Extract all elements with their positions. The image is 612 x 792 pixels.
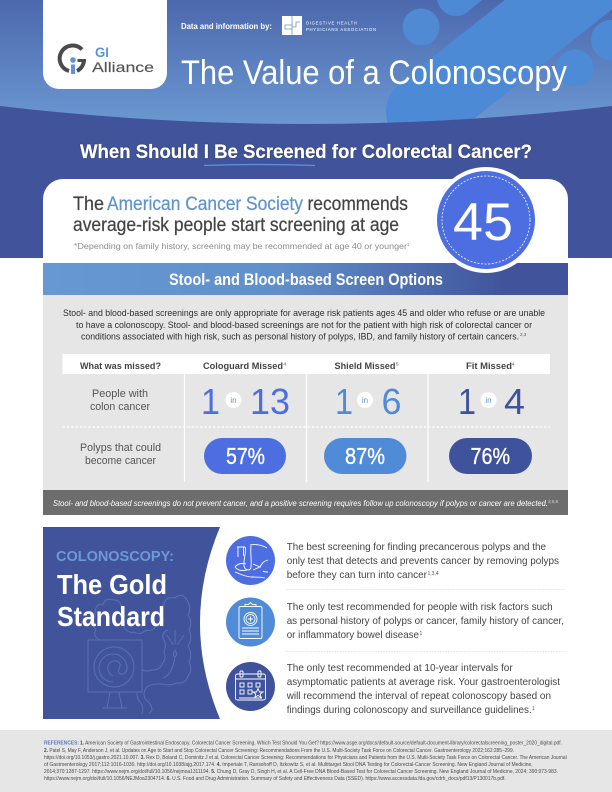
text: best screening: 1,3,4 xyxy=(428,571,439,577)
recommendation text: The xyxy=(73,194,104,215)
illustration: screen and colon outline xyxy=(88,595,191,714)
stat: Cologuard 1 in 13 xyxy=(201,381,290,422)
recommendation text: American Cancer Society xyxy=(107,194,303,215)
stat: Fit 1 in 4: 4 xyxy=(504,381,525,422)
intro paragraph: 2,3 xyxy=(520,332,527,337)
text: best screening xyxy=(287,541,559,581)
stat: Cologuard 1 in 13: 1 xyxy=(201,381,220,422)
table header row: 4 xyxy=(284,362,286,366)
section heading: When Should I Be Screened for Colorectal Cancer? xyxy=(80,142,532,163)
logo wordmark: Alliance xyxy=(92,59,154,75)
data and information credit: DIGESTIVE HEALTH xyxy=(306,20,357,26)
logo wordmark: GI xyxy=(95,45,109,60)
stat pill: Cologuard 57% xyxy=(204,438,286,474)
table header row: What was missed? xyxy=(80,361,161,371)
recommendation text xyxy=(73,194,408,236)
intro paragraph: conditions associated with high risk, such as personal history of polyps, IBD, and family history of certain cancers. xyxy=(81,332,519,342)
text: 10-year intervals: asymptomatic patients at average risk. Your gastroenterologist xyxy=(287,676,560,688)
stat: Fit 1 in 4: in xyxy=(485,396,492,405)
references xyxy=(0,730,612,792)
table header row: Cologuard Missed xyxy=(203,361,283,371)
row label: people with colon cancer xyxy=(90,388,150,413)
stat pill: Cologuard 57%: 57% xyxy=(226,443,265,469)
text: risk factors: as personal history of polyps or cancer, family history of cancer, xyxy=(287,615,564,627)
warning bar: 3,5,6 xyxy=(548,499,559,504)
icon: GI Alliance mark xyxy=(60,46,86,74)
references: 1. American Society of Gastrointestinal Endoscopy. Colorectal Cancer Screening, Which Test Should You Get? https://www.asge.org/docs/default-source/default-document-library/colorectalscreening_poster_2020_digital.pdf. xyxy=(80,740,562,746)
table header row: 4 xyxy=(512,362,515,366)
badge: age 45: 45 xyxy=(453,193,513,252)
panel heading xyxy=(57,569,167,632)
panel: stool and blood heading bar xyxy=(43,263,568,295)
references: REFERENCES: xyxy=(44,740,79,746)
warning bar xyxy=(43,490,568,515)
dark blue band xyxy=(0,106,612,258)
panel: stool and blood comparison xyxy=(43,295,568,490)
text: risk factors: 1 xyxy=(420,631,422,637)
recommendation text: recommends xyxy=(308,194,408,215)
data and information credit: Data and information by: xyxy=(181,22,272,31)
table header row xyxy=(62,354,550,374)
stat: Cologuard 1 in 13: in xyxy=(230,396,237,405)
stat pill: Fit 76%: 76% xyxy=(470,443,510,469)
text: best screening: only test that detects and prevents cancer by removing polyps xyxy=(287,555,559,567)
stat: Cologuard 1 in 13: 13 xyxy=(250,381,290,422)
stat: Shield 1 in 6: 6 xyxy=(382,381,402,422)
panel: the gold standard xyxy=(43,527,220,719)
text: 10-year intervals: The only test recommended at 10-year intervals for xyxy=(287,662,513,674)
row label: polyps that could become cancer: become cancer xyxy=(85,455,156,467)
stat: Shield 1 in 6: 1 xyxy=(335,381,353,422)
text: 10-year intervals: 1 xyxy=(532,706,535,712)
table header row: Fit Missed xyxy=(466,361,512,371)
panel: stool and blood heading bar: Stool- and Blood-based Screen Options xyxy=(169,271,443,289)
text: best screening: The best screening for finding precancerous polyps and the xyxy=(287,541,546,553)
footnote: *Depending on family history, screening may be recommended at age 40 or younger xyxy=(74,241,407,251)
logo wordmark xyxy=(92,45,154,75)
stat pill: Shield 87% xyxy=(324,438,406,474)
icon: calendar xyxy=(226,662,275,711)
table header row: Shield Missed xyxy=(334,361,396,371)
text: best screening: before they can turn into cancer xyxy=(287,569,427,581)
warning bar: Stool- and blood-based screenings do not prevent cancer, and a positive screening requires follow up colonoscopy if polyps or cancer are detected. xyxy=(53,499,548,508)
icon: clipboard xyxy=(226,598,275,646)
panel heading: The Gold xyxy=(57,569,167,600)
references: of Gastroenterology 2017;112:1016-1030. http://doi.org/10.1038/ajg.2017.174. 4. Imperiale T, Ransohoff D, Itzkowitz S, et al. Multitarget Stool DNA Testing for Colorectal-Cancer Screening. New England Journal of Medicine, xyxy=(44,762,533,768)
text: 10-year intervals: will recommend the interval of repeat colonoscopy based on xyxy=(286,690,551,702)
stat pill: Fit 76% xyxy=(449,438,532,474)
references: 2. Patel S, May F, Anderson J, et al. Updates on Age to Start and Stop Colorectal Cancer Screening: Recommendations From the U.S. Multi-Society Task Force on Colorectal Cancer. Gastroenterology 2022;162:285–299. xyxy=(44,748,514,754)
table header row: 5 xyxy=(396,362,399,366)
row label: people with colon cancer: People with xyxy=(92,388,148,400)
intro paragraph xyxy=(63,308,545,342)
text: 10-year intervals: findings during colonoscopy and surveillance guidelines. xyxy=(287,704,532,716)
panel: age recommendation card xyxy=(43,179,568,263)
stat: Fit 1 in 4: 1 xyxy=(458,381,476,422)
panel heading: Standard xyxy=(57,601,165,632)
text: risk factors: or inflammatory bowel disease xyxy=(287,629,419,641)
header background xyxy=(0,0,612,130)
stat: Shield 1 in 6 xyxy=(335,381,402,422)
text: 10-year intervals xyxy=(286,662,560,716)
text: risk factors: The only test recommended for people with risk factors such xyxy=(287,601,553,613)
intro paragraph: to have a colonoscopy. Stool- and blood-based screenings are not for the patient with high risk of colorectal cancer or xyxy=(76,320,532,330)
stat: Shield 1 in 6: in xyxy=(362,396,368,405)
intro paragraph: Stool- and blood-based screenings are only appropriate for average risk patients ages 45 and older who refuse or are unable xyxy=(63,308,545,318)
badge: age 45 xyxy=(433,167,539,273)
references: https://doi.org/10.1053/j.gastro.2021.10.007. 3. Rex D, Boland C, Dominitz J et al. Colorectal Cancer Screening: Recommendations for Physicians and Patients from the U.S. Multi-Society Task Force on Colorectal Cancer. The American Journal xyxy=(44,755,567,761)
text: risk factors xyxy=(287,601,564,641)
stat pill: Shield 87%: 87% xyxy=(345,443,385,469)
data and information credit: PHYSICIANS ASSOCIATION xyxy=(306,27,376,32)
row label: people with colon cancer: colon cancer xyxy=(90,401,150,413)
data and information credit xyxy=(181,16,376,35)
icon: DHPA logo xyxy=(282,16,302,35)
icon: colonoscope xyxy=(226,536,275,585)
panel kicker: COLONOSCOPY: xyxy=(56,549,174,565)
title: The Value of a Colonoscopy xyxy=(181,54,567,92)
references: 2014;370:1287-1297. https://www.nejm.org/doi/full/10.1056/nejmoa1311194. 5. Chung D, Gray D, Singh H, et al. A Cell-Free DNA Blood-Based Test for Colorectal Cancer Screening. New England Journal of Medicine, 2024; 390:973-983. xyxy=(44,769,558,775)
logo card xyxy=(43,0,167,89)
row label: polyps that could become cancer: Polyps that could xyxy=(80,442,161,454)
row label: polyps that could become cancer xyxy=(80,442,161,467)
stat: Fit 1 in 4 xyxy=(458,381,525,422)
references: https://www.nejm.org/doi/full/10.1056/NEJMoa2304714. 6. U.S. Food and Drug Administration. Summary of Safety and Effectiveness Data (SSED). https://www.accessdata.fda.gov/cdrh_docs/pdf13/P130017b.pdf. xyxy=(44,776,506,782)
recommendation text: average-risk people start screening at age xyxy=(73,215,399,236)
panel: age recommendation card: 1 xyxy=(407,242,410,247)
